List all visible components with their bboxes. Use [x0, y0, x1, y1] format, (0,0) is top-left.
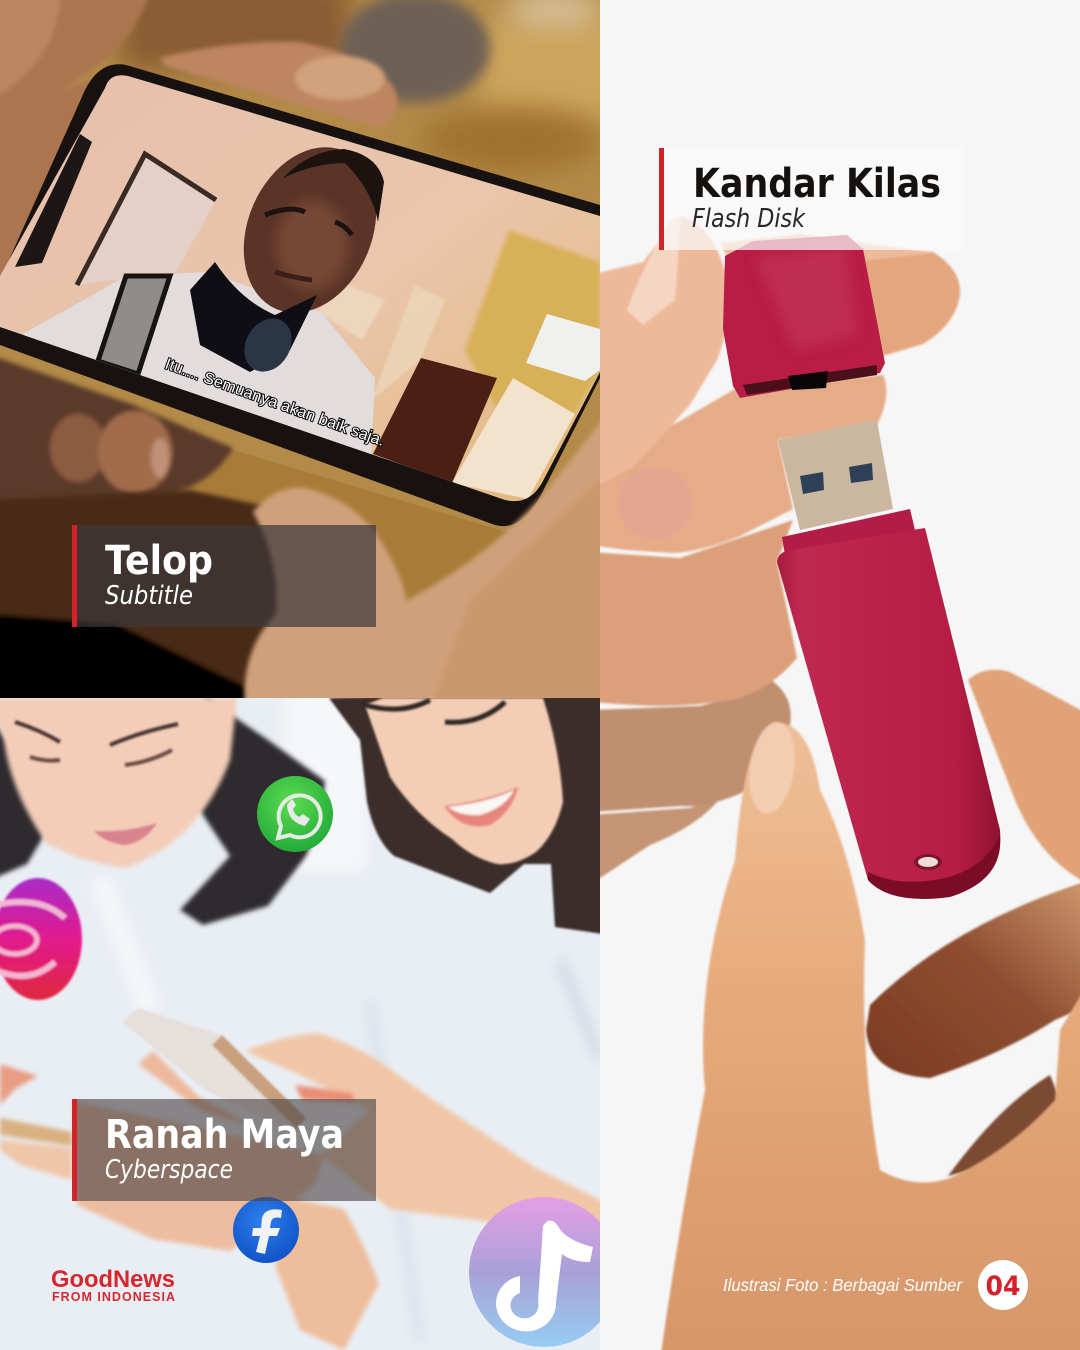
hand above the phone: [0, 0, 400, 276]
icon: WhatsApp bubble: [257, 776, 333, 852]
left woman's brows and mouth: [15, 722, 178, 845]
icon: USB connector: [778, 421, 893, 530]
photo credit: Ilustrasi Foto : Berbagai Sumber: [723, 1275, 963, 1295]
right woman's hair: [329, 690, 610, 935]
left woman's face: [0, 698, 237, 868]
blurred room background: [0, 0, 600, 533]
heading: Kandar Kilas: Kandar Kilas: [693, 161, 941, 207]
right side fingers: [866, 670, 1080, 1176]
right woman's eyes and smile: [362, 700, 518, 826]
man's shirt: [23, 272, 375, 460]
wooden cabinet: [373, 358, 497, 483]
label: Kandar Kilas: [659, 148, 963, 250]
golden wall: [463, 228, 600, 442]
logo: GoodNews from Indonesia: FROM INDONESIA: [52, 1290, 175, 1304]
dark lower left shadow: [0, 488, 278, 698]
collar and shirt shading: [100, 880, 600, 1340]
table under the phone: [189, 450, 505, 598]
panel: bottom left photo, two women with phones: [0, 690, 619, 1350]
bright background and shirts: [0, 698, 600, 1350]
icon: red flash disk body: [777, 421, 1000, 899]
phone body: [0, 64, 600, 526]
fingers holding the cap: [590, 216, 960, 880]
thumb and palm at lower right: [244, 410, 610, 710]
subtitle text: Itu.... Semuanya akan baik saja.: [163, 356, 387, 450]
heading: Ranah Maya: Ranah Maya: [105, 1112, 344, 1158]
backpack straps: [98, 276, 170, 374]
window: [526, 314, 600, 381]
logo: GoodNews from Indonesia: GoodNews: [51, 1266, 175, 1293]
man's head: [244, 147, 376, 312]
lower hand fingers: [0, 355, 233, 507]
panel: right photo, hand holding flash disk: [590, 0, 1080, 1350]
icon: TikTok bubble: [469, 1197, 619, 1347]
icon: Facebook bubble: [233, 1197, 299, 1263]
page number badge: 04: [986, 1271, 1020, 1302]
thumb and palm: [660, 719, 1080, 1350]
panel: top left photo, phone showing subtitled video: [0, 0, 630, 710]
headphones: [190, 262, 317, 372]
subheading: Subtitle: Subtitle: [105, 581, 193, 611]
page number badge: [978, 1260, 1028, 1310]
subheading: Flash Disk: Flash Disk: [692, 204, 806, 234]
icon: red flash disk cap: [723, 235, 885, 398]
subheading: Cyberspace: Cyberspace: [105, 1155, 233, 1185]
icon: Instagram bubble: [0, 878, 82, 1000]
phone screen showing a man: [0, 60, 600, 510]
heading: Telop: Telop: [105, 538, 213, 584]
notch of the phone: [15, 134, 92, 267]
label: Telop: [72, 525, 376, 627]
phones and hands: [0, 1033, 610, 1350]
background door: [77, 154, 216, 285]
right woman's face: [365, 698, 563, 864]
phone held by the left woman: [122, 1008, 306, 1132]
furniture in the hallway: [318, 280, 445, 400]
left woman's hair: [0, 698, 325, 925]
label: Ranah Maya: [72, 1099, 376, 1201]
